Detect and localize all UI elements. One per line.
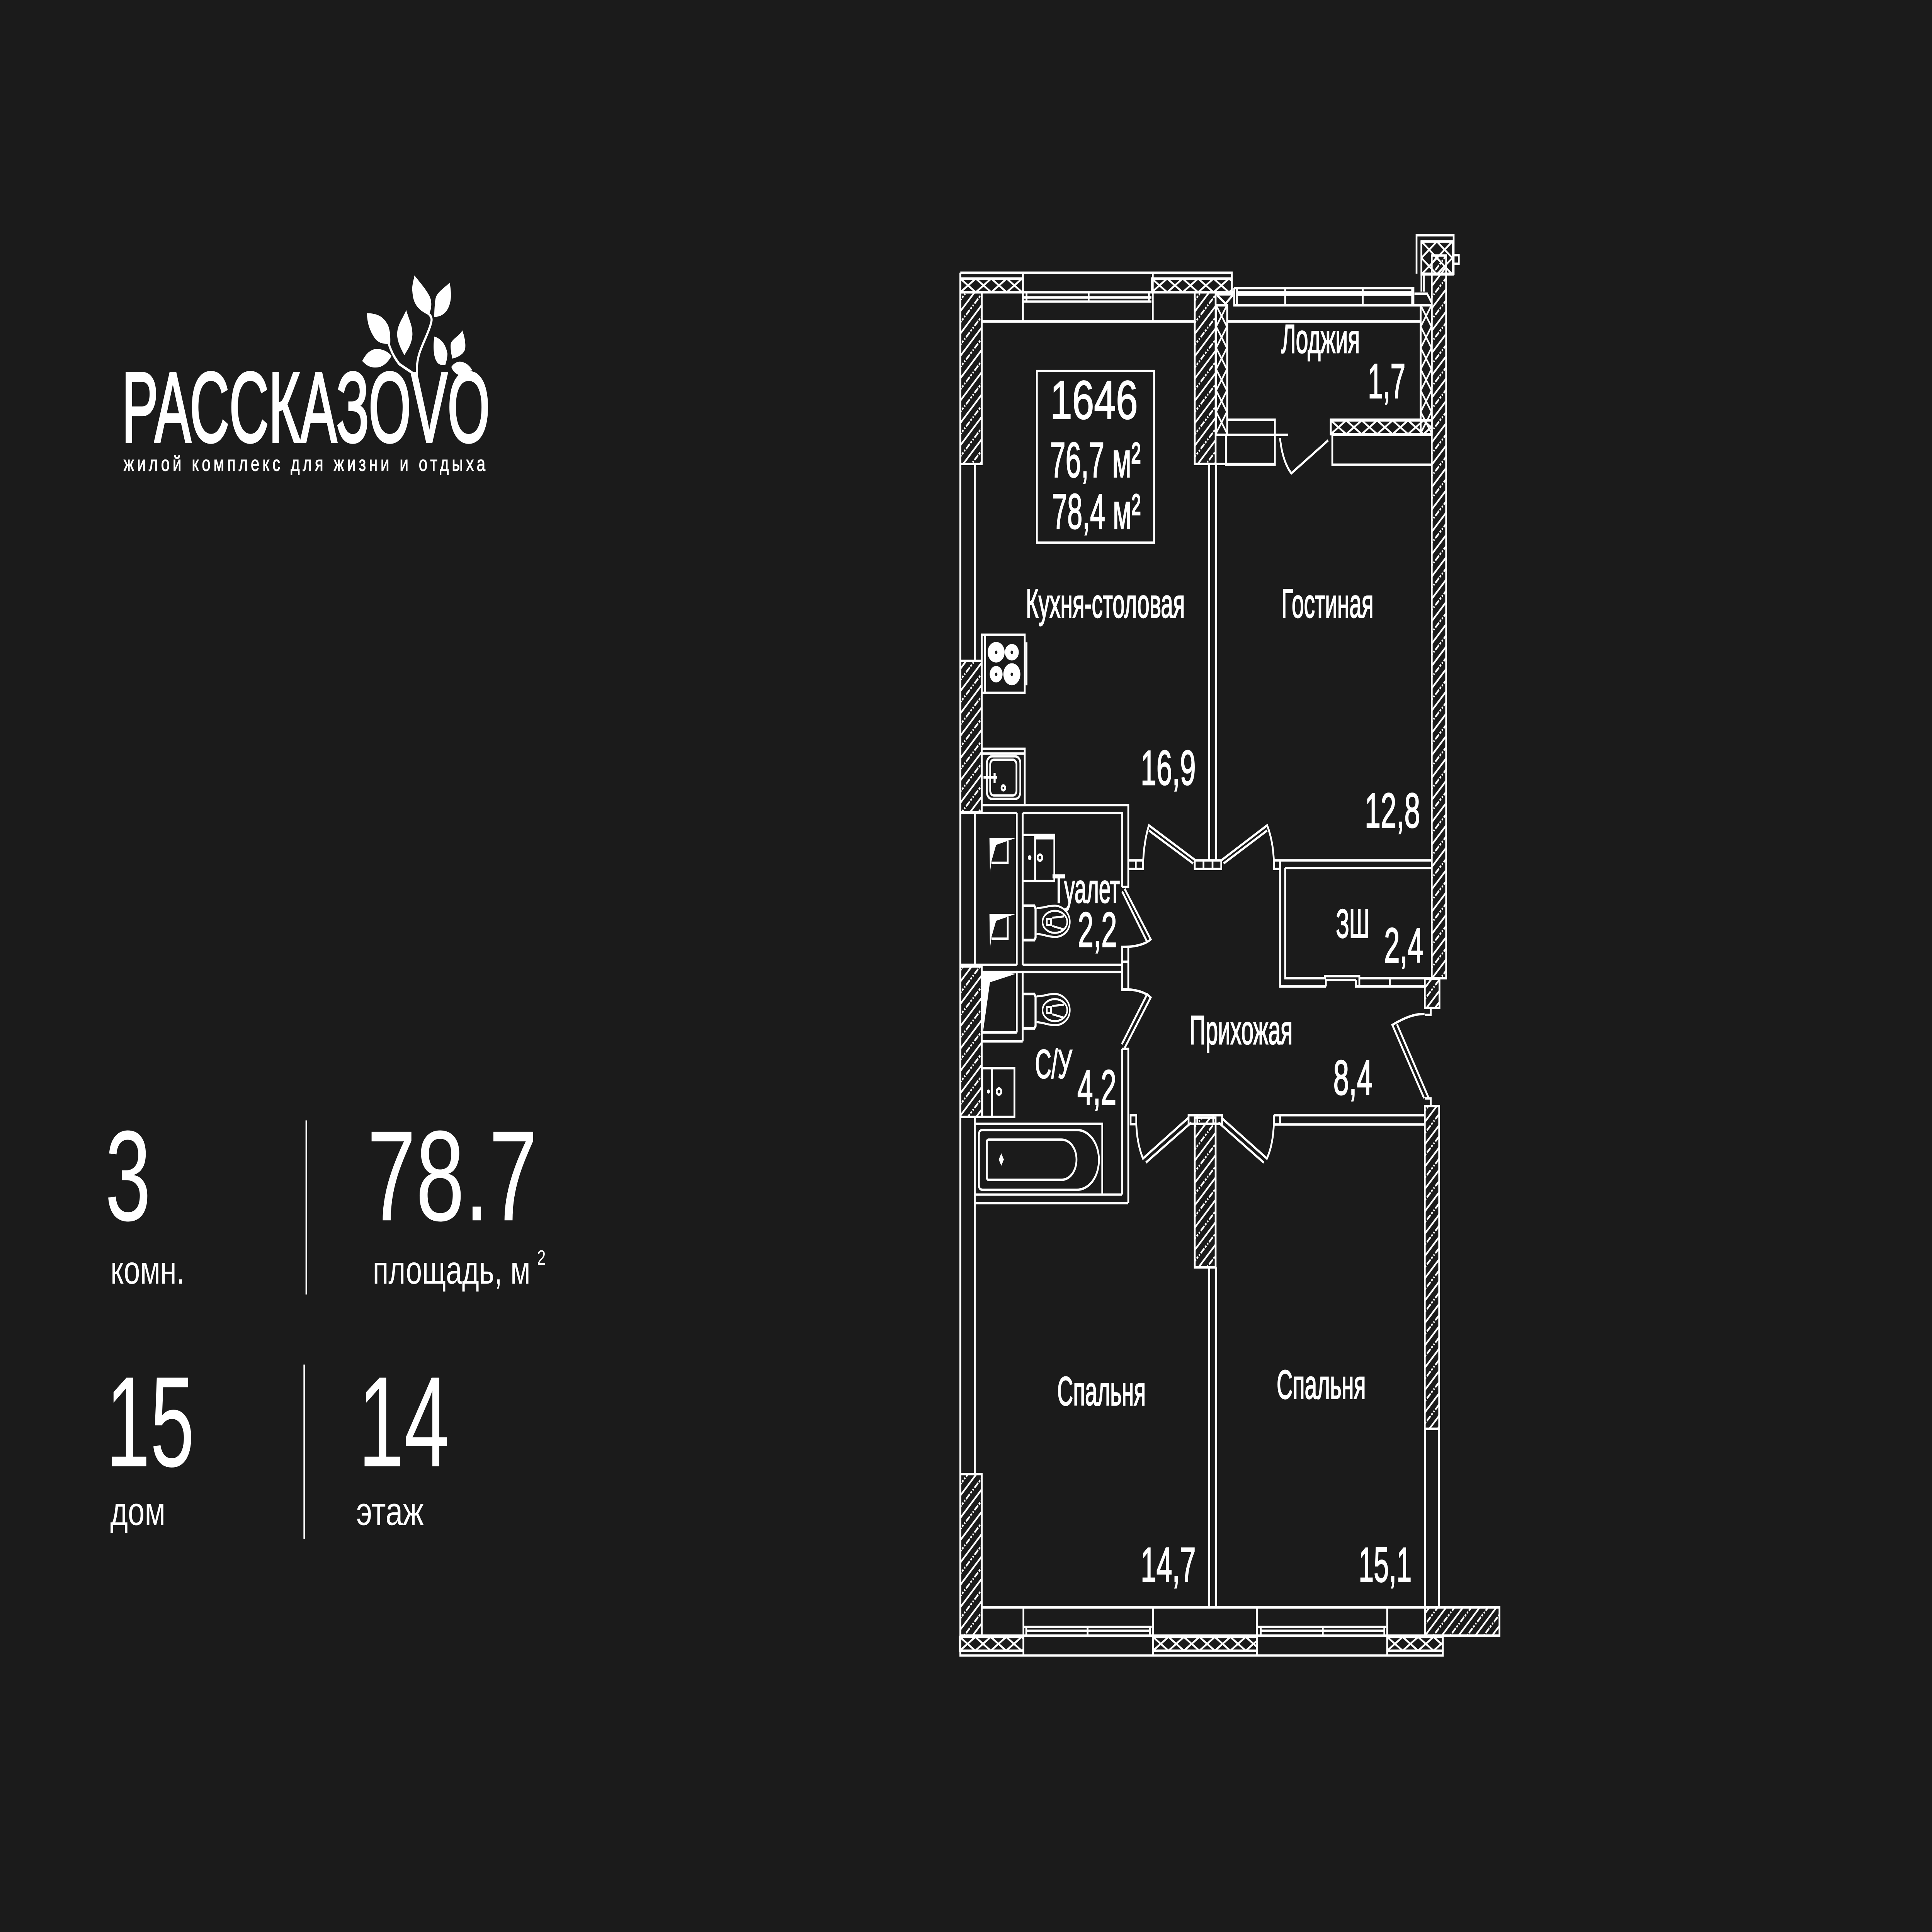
stat: building — [106, 1350, 194, 1534]
total area: 78,4 м² — [1052, 484, 1141, 539]
stat: area — [367, 1104, 546, 1292]
floor plan — [960, 235, 1500, 1655]
kitchen sink — [982, 749, 1025, 805]
label: bedroom 2 area: 15,1 — [1359, 1537, 1412, 1592]
label: bathroom: С/У — [1035, 1041, 1072, 1087]
hatched structural walls — [960, 255, 1500, 1636]
floor label: этаж — [356, 1490, 424, 1534]
door: bedroom 1 — [1136, 1117, 1191, 1163]
toilet room sink — [1023, 835, 1054, 881]
floor number: 14 — [358, 1350, 449, 1494]
toilet 1 — [1023, 906, 1070, 940]
living area: 76,7 м² — [1050, 432, 1141, 488]
divider — [303, 1365, 305, 1539]
bathtub — [979, 1130, 1099, 1190]
door: loggia — [1280, 438, 1328, 473]
door: bedroom 2 — [1218, 1117, 1274, 1163]
label: living area: 12,8 — [1365, 783, 1420, 838]
kitchen stove — [982, 635, 1027, 693]
label: kitchen area: 16,9 — [1141, 740, 1196, 795]
label: wardrobe area: 2,4 — [1384, 918, 1423, 973]
bathroom sink — [982, 1068, 1014, 1117]
label: hallway: Прихожая — [1190, 1007, 1293, 1053]
area label: площадь, м — [373, 1248, 531, 1292]
door: entrance — [1392, 1014, 1429, 1098]
label: toilet area: 2,2 — [1078, 902, 1117, 957]
toilet 2 — [1023, 994, 1070, 1028]
divider — [306, 1121, 307, 1294]
label: bedroom 2: Спальня — [1277, 1362, 1366, 1407]
apartment info box — [1037, 370, 1154, 543]
area number: 78.7 — [367, 1104, 537, 1248]
door: bathroom — [1122, 989, 1151, 1048]
label: kitchen: Кухня-столовая — [1026, 581, 1185, 626]
door: kitchen — [1143, 825, 1196, 868]
logo wordmark: РАССКАЗОVО — [122, 352, 490, 463]
stat: floor — [356, 1350, 449, 1534]
label: living room: Гостиная — [1281, 581, 1374, 626]
building label: дом — [110, 1490, 165, 1534]
superscript: 2 — [537, 1246, 546, 1269]
label: loggia area: 1,7 — [1368, 354, 1405, 408]
label: bathroom area: 4,2 — [1077, 1060, 1116, 1115]
bathroom shaft — [981, 971, 1016, 1032]
rooms number: 3 — [105, 1104, 151, 1248]
logo tagline: жилой комплекс для жизни и отдыха — [124, 452, 486, 475]
door: living room — [1221, 825, 1274, 868]
apartment number: 1646 — [1050, 370, 1138, 430]
logo — [122, 276, 490, 475]
wall and window outlines — [960, 235, 1500, 1655]
label: bedroom 1 area: 14,7 — [1141, 1537, 1196, 1592]
stat: rooms — [105, 1104, 185, 1292]
building number: 15 — [106, 1350, 194, 1494]
label: bedroom 1: Спальня — [1057, 1368, 1146, 1414]
shaft marks — [990, 838, 1016, 949]
label: hallway area: 8,4 — [1333, 1050, 1372, 1105]
label: toilet: Туалет — [1052, 866, 1120, 912]
label: wardrobe: ЗШ — [1336, 901, 1369, 946]
label: loggia: Лоджия — [1281, 316, 1360, 362]
icon: branch with leaves — [362, 276, 472, 376]
doors — [1122, 438, 1429, 1163]
insulation bands — [960, 242, 1453, 1651]
rooms label: комн. — [111, 1248, 185, 1292]
door: toilet — [1122, 889, 1151, 947]
room labels — [1026, 316, 1423, 1592]
